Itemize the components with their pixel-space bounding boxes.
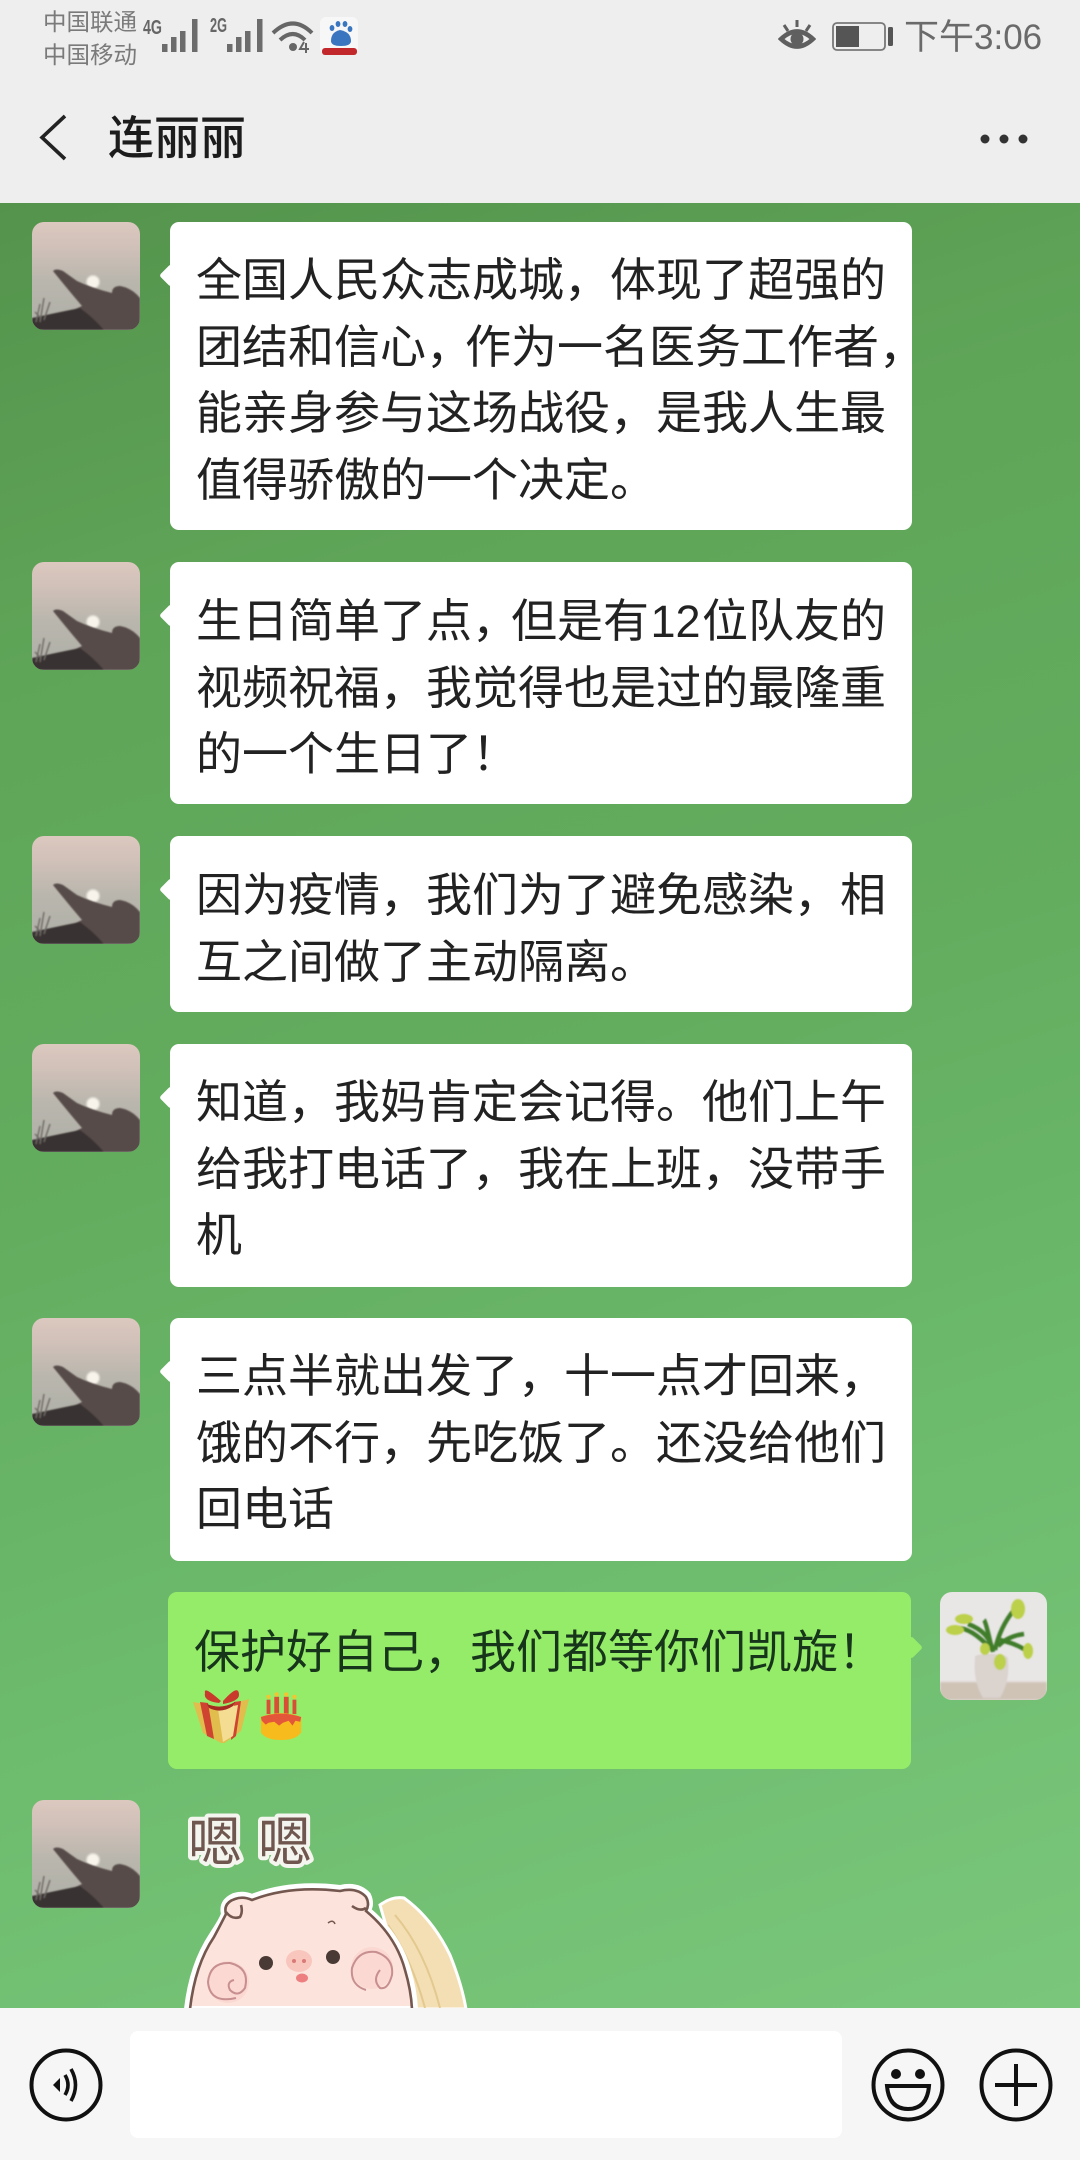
- message 3: bubble: [170, 836, 912, 1012]
- message 5 text: [196, 1340, 886, 1539]
- message 5 text: 回电话: [196, 1473, 334, 1539]
- message 2 text: 的一个生日了！: [196, 718, 518, 784]
- icon: more menu dots: [980, 134, 1028, 144]
- pig face: [207, 1947, 393, 2003]
- message 6: own avatar with plant: [940, 1592, 1047, 1700]
- message 1 text: 能亲身参与这场战役，是我人生最: [196, 377, 886, 443]
- sticker: pig with text: [184, 1805, 468, 2008]
- message 4 text: 机: [196, 1199, 242, 1265]
- message 1: bubble: [170, 222, 912, 530]
- bottom input bar: [0, 2008, 1080, 2160]
- message 2 text: 生日简单了点，但是有 位队友的: [196, 585, 886, 651]
- carrier labels: [43, 3, 137, 70]
- message 3 text: 互之间做了主动隔离。: [196, 926, 656, 992]
- message 4 text: [196, 1066, 886, 1265]
- message 2: avatar: [32, 562, 140, 670]
- clock: 下午3:06: [904, 18, 1042, 57]
- top status and title bar: [0, 0, 1080, 203]
- icon: voice button: [30, 2048, 102, 2122]
- message 7: avatar: [32, 1800, 140, 1908]
- message 4 text: 知道，我妈肯定会记得。他们上午: [196, 1066, 886, 1132]
- icon: back arrow: [40, 114, 66, 160]
- carrier labels: 中国联通: [43, 3, 137, 37]
- message 4: avatar: [32, 1044, 140, 1152]
- message 3 text: [196, 859, 886, 992]
- message 6: green reply bubble: [168, 1592, 911, 1769]
- message 2 text: [196, 585, 886, 784]
- message 5: bubble: [170, 1318, 912, 1561]
- message 3: avatar: [32, 836, 140, 944]
- icon: network signals, wifi and app: 2G: [210, 15, 227, 37]
- message 2 text: 视频祝福，我觉得也是过的最隆重: [196, 652, 886, 718]
- message 5 text: 三点半就出发了，十一点才回来，: [196, 1340, 886, 1406]
- icon: network signals, wifi and app: [143, 15, 358, 55]
- contact name title: 连丽丽: [108, 102, 246, 168]
- message 5 text: 饿的不行，先吃饭了。还没给他们: [196, 1407, 886, 1473]
- message 1 text: 团结和信心，作为一名医务工作者，: [196, 311, 925, 377]
- message 1 text: 值得骄傲的一个决定。: [196, 444, 656, 510]
- message 1: avatar: [32, 222, 140, 330]
- icon: network signals, wifi and app: 4G: [143, 17, 162, 39]
- icon: plus button: [980, 2048, 1052, 2122]
- bubble pointer: [900, 1636, 923, 1659]
- icon: gift emoji: [193, 1690, 249, 1743]
- icon: emoji button: [872, 2048, 944, 2122]
- icon: battery: [832, 22, 893, 51]
- message 4 text: 给我打电话了，我在上班，没带手: [196, 1133, 886, 1199]
- hair: [380, 1898, 466, 2009]
- icon: eye comfort mode: [778, 20, 816, 49]
- message 6 text: 保护好自己，我们都等你们凯旋！: [194, 1616, 884, 1682]
- icon: birthday cake emoji: [260, 1692, 302, 1740]
- text input field: [130, 2031, 842, 2138]
- message 1 text: 全国人民众志成城，体现了超强的: [196, 244, 886, 310]
- message 5: avatar: [32, 1318, 140, 1426]
- message 2: bubble: [170, 562, 912, 804]
- message 1 text: [196, 244, 925, 510]
- pig head: [187, 1886, 415, 2009]
- message 4: bubble: [170, 1044, 912, 1287]
- sticker caption: [188, 1798, 312, 1877]
- carrier labels: 中国移动: [43, 36, 137, 70]
- message 3 text: 因为疫情，我们为了避免感染，相: [196, 859, 886, 925]
- message 2 text: 12: [650, 596, 701, 647]
